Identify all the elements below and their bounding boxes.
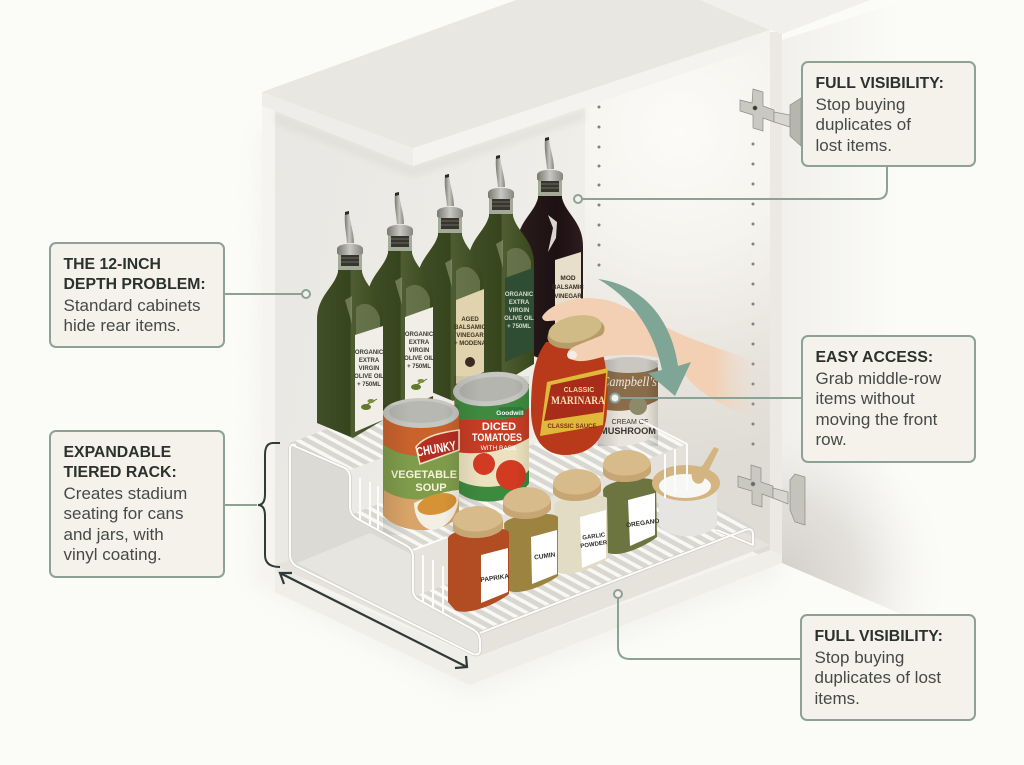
bottle 5 balsamic: MOD	[560, 275, 576, 282]
spice jar: garlic powder	[553, 469, 608, 574]
bottle 5 balsamic: VINEGAR	[554, 294, 582, 300]
rack middle deck	[350, 409, 687, 550]
callout: full visibility bottom: duplicates of lost	[814, 668, 941, 687]
rack wire outline	[290, 444, 753, 654]
can: vegetable soup: SOUP	[415, 482, 447, 494]
background shadow	[252, 120, 780, 700]
hand: thumb	[567, 332, 662, 361]
bottles	[317, 137, 584, 438]
spice jar: cumin: CUMIN	[534, 552, 556, 561]
hand and arm	[542, 298, 757, 418]
bottle 4 olive oil: VIRGIN	[509, 308, 529, 314]
bottle 1 olive oil	[317, 211, 384, 438]
bracket: rack height	[258, 443, 280, 567]
bottle 2 olive oil: OLIVE OIL	[404, 356, 434, 362]
can: diced tomatoes	[452, 369, 530, 506]
rack back riser right	[640, 444, 687, 508]
spice jar: oregano: OREGANO	[626, 518, 660, 529]
shelf peg holes	[598, 106, 754, 446]
callout: full visibility top	[801, 61, 976, 167]
bottle 1 olive oil: + 750ML	[357, 382, 381, 388]
can: diced tomatoes: DICED	[482, 421, 516, 433]
callout: full visibility bottom	[800, 614, 976, 721]
callout: the 12-inch depth problem	[49, 242, 225, 348]
callout: expandable tiered rack	[49, 430, 225, 578]
cabinet top panel	[262, 0, 770, 178]
spice jar: cumin	[503, 487, 558, 592]
callout: easy access: EASY ACCESS:	[816, 349, 933, 366]
callout: expandable tiered rack: and jars, with	[64, 525, 164, 544]
bottle 4 olive oil: ORGANIC	[505, 292, 534, 298]
bottle 4 olive oil: + 750ML	[507, 324, 531, 330]
callout: the 12-inch depth problem: THE 12-INCH	[64, 256, 161, 273]
connector: depth problem	[224, 290, 310, 298]
can: cream of mushroom	[598, 357, 658, 446]
callout: easy access: items without	[816, 389, 915, 408]
can: cream of mushroom: Campbell's	[601, 375, 657, 390]
spice jar: garlic powder: POWDER	[580, 540, 608, 550]
can: diced tomatoes: WITH BASIL	[481, 445, 518, 452]
callout: full visibility bottom: Stop buying	[814, 648, 904, 667]
bottle 3 olive oil	[417, 174, 487, 401]
cabinet bottom lip	[275, 550, 782, 685]
jar: marinara body: CLASSIC SAUCE	[547, 424, 597, 430]
bottle 4 olive oil	[468, 155, 534, 382]
bottle 4 olive oil: OLIVE OIL	[504, 316, 534, 322]
bottle 4 olive oil: EXTRA	[509, 300, 530, 306]
bottle 1 olive oil: EXTRA	[359, 358, 380, 364]
rack riser wires	[360, 420, 687, 613]
wire rack front edges	[290, 420, 753, 654]
bottle 2 olive oil: EXTRA	[409, 340, 430, 346]
arrow: curved pull-forward arrow	[598, 279, 691, 396]
jar: marinara body: MARINARA	[551, 393, 605, 407]
can: vegetable soup: CHUNKY	[415, 438, 457, 459]
spice jar: oregano	[603, 450, 660, 554]
callout: full visibility top: FULL VISIBILITY:	[816, 75, 944, 92]
connector: full visibility top	[574, 166, 887, 203]
bottle 1 olive oil: ORGANIC	[355, 350, 384, 356]
cabinet left side panel	[262, 100, 275, 585]
arrow: cabinet depth dimension	[280, 573, 467, 668]
wire rack back portion	[290, 397, 753, 655]
cabinet front post	[770, 32, 782, 563]
can: cream of mushroom: CREAM OF	[612, 419, 648, 426]
bottle 2 olive oil: VIRGIN	[409, 348, 429, 354]
connector: full visibility bottom	[614, 590, 800, 659]
icon: bottom hinge	[738, 465, 805, 525]
icon: top hinge	[740, 89, 801, 146]
can: cream of mushroom: MUSHROOM	[600, 426, 656, 437]
cabinet door	[782, 0, 940, 630]
callout: full visibility top: lost items.	[816, 136, 892, 155]
jar: marinara lid	[545, 311, 607, 354]
cabinet floor	[275, 455, 770, 657]
callout: full visibility top: duplicates of	[816, 115, 911, 134]
connector: easy access	[610, 394, 801, 402]
bottle 3 olive oil: + MODENA	[454, 341, 487, 347]
callout: the 12-inch depth problem: DEPTH PROBLEM:	[64, 276, 206, 293]
callout: easy access: row.	[816, 430, 847, 449]
callout: full visibility bottom: items.	[814, 689, 860, 708]
spice jar: paprika	[448, 506, 510, 612]
connector: expandable rack	[224, 504, 257, 506]
callout: the 12-inch depth problem: Standard cabinets	[64, 296, 201, 315]
callout: expandable tiered rack: EXPANDABLE	[64, 444, 171, 461]
bottle 2 olive oil: + 750ML	[407, 364, 431, 370]
jar: marinara body: CLASSIC	[564, 387, 594, 394]
callout: full visibility top: Stop buying	[816, 95, 905, 114]
rack side panel	[290, 443, 480, 655]
rack lower deck	[413, 491, 753, 633]
callout: easy access: Grab middle-row	[816, 369, 941, 388]
salt bowl with wooden spoon	[652, 447, 720, 536]
rack top deck	[290, 397, 470, 470]
cabinet	[262, 0, 950, 685]
spice jar: paprika: PAPRIKA	[480, 573, 510, 584]
rack floor seen through	[297, 533, 480, 654]
bottle 1 olive oil: VIRGIN	[359, 366, 379, 372]
cabinet back wall	[275, 100, 586, 580]
cabinet right inner wall	[585, 42, 770, 560]
callout: expandable tiered rack: TIERED RACK:	[64, 464, 177, 481]
bottle 5 balsamic: BALSAMIC	[552, 285, 584, 291]
bottle 1 olive oil: OLIVE OIL	[354, 374, 384, 380]
rack wire outline shadow	[290, 444, 753, 654]
callout: expandable tiered rack: Creates stadium	[64, 484, 187, 503]
bottle 3 olive oil: VINEGAR	[456, 333, 484, 339]
bottle 3 olive oil: BALSAMIC	[454, 325, 486, 331]
bottle 5 balsamic	[517, 137, 584, 364]
jar: marinara body	[531, 342, 608, 455]
can: vegetable soup	[383, 398, 459, 535]
callout: the 12-inch depth problem: hide rear items.	[64, 316, 181, 335]
callout: expandable tiered rack: seating for cans	[64, 504, 184, 523]
door top edge	[700, 0, 870, 34]
bottle 2 olive oil: ORGANIC	[405, 332, 434, 338]
cabinet door lower shade	[782, 400, 950, 635]
can: vegetable soup: VEGETABLE	[391, 469, 457, 481]
callout: full visibility bottom: FULL VISIBILITY:	[814, 628, 943, 645]
callout: easy access	[801, 335, 976, 463]
callout: easy access: moving the front	[816, 410, 937, 429]
bottle 2 olive oil	[367, 192, 434, 419]
can: diced tomatoes: Goodwill	[496, 410, 524, 417]
bottle 3 olive oil: AGED	[461, 317, 479, 323]
spice jar: garlic powder: GARLIC	[582, 532, 606, 542]
callout: expandable tiered rack: vinyl coating.	[64, 545, 162, 564]
can: diced tomatoes: TOMATOES	[472, 432, 522, 444]
